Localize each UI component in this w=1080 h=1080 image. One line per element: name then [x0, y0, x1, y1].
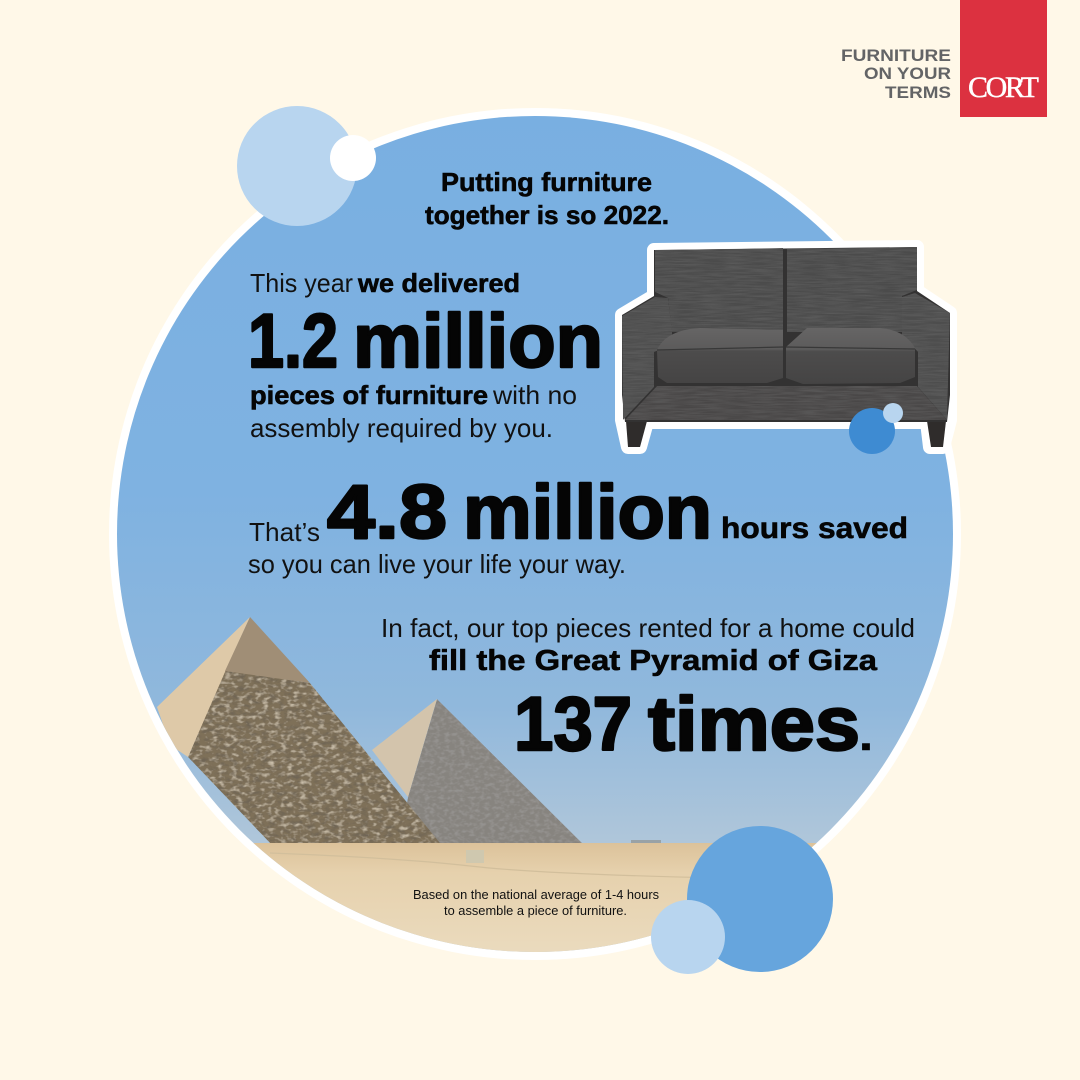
stat: 1.2 million pieces [248, 268, 603, 443]
back cushions [655, 247, 917, 332]
stat: 4.8 million hours saved: million [463, 470, 712, 555]
tagline: ON YOUR [864, 64, 951, 83]
seat cushions [657, 328, 915, 384]
stat: 4.8 million hours saved: 4.8 [327, 470, 447, 555]
sky [110, 110, 960, 960]
stat: 4.8 million hours saved [248, 470, 908, 579]
logo block [960, 0, 1047, 117]
sofa sticker outline [622, 247, 950, 447]
stat: 1.2 million pieces: assembly required by you. [250, 413, 553, 443]
stat: 1.2 million pieces: million [353, 299, 603, 384]
footnote [413, 887, 659, 918]
stat: 1.2 million pieces: 1.2 [248, 299, 338, 384]
sofa illustration [622, 247, 950, 454]
heading [425, 167, 669, 230]
stat: 4.8 million hours saved: so you can live your life your way. [248, 549, 626, 579]
tagline: FURNITURE [841, 46, 951, 65]
sofa base [625, 386, 947, 420]
logo wordmark: CORT [968, 71, 1039, 104]
stat: 137 times: 137 [514, 682, 632, 767]
sofa arms [622, 293, 950, 420]
sofa legs [626, 421, 946, 447]
stat: 137 times: fill the Great Pyramid of Giza [429, 645, 878, 677]
heading: Putting furniture [441, 167, 652, 197]
stat: 1.2 million pieces: This year [250, 268, 353, 298]
desert ground [254, 843, 816, 952]
sofa bubbles [849, 403, 903, 454]
stone block [466, 850, 484, 863]
near pyramid [157, 617, 440, 843]
decorative bubbles top left [237, 106, 376, 226]
sofa body [622, 247, 950, 422]
far pyramid [372, 699, 582, 843]
stat: 137 times: . [859, 711, 873, 760]
stat: 1.2 million pieces: with no [492, 380, 577, 410]
stat: 137 times: In fact, our top pieces rented for a home could [381, 613, 915, 643]
tagline: TERMS [885, 83, 951, 102]
stat: 1.2 million pieces: pieces of furniture [250, 380, 488, 410]
main circle panel with sky and pyramids [109, 108, 961, 963]
heading: together is so 2022. [425, 200, 669, 230]
ground tracks [270, 853, 720, 878]
stat: 137 times: times [648, 682, 860, 767]
stat: 4.8 million hours saved: That’s [249, 517, 320, 547]
decorative bubbles bottom right [651, 826, 833, 974]
tagline [841, 46, 951, 102]
distant figures [631, 840, 661, 843]
footnote: Based on the national average of 1-4 hours [413, 887, 659, 902]
stat: 137 times [381, 613, 915, 767]
stat: 4.8 million hours saved: hours saved [721, 512, 908, 545]
stat: 1.2 million pieces: we delivered [357, 268, 520, 298]
footnote: to assemble a piece of furniture. [444, 903, 627, 918]
